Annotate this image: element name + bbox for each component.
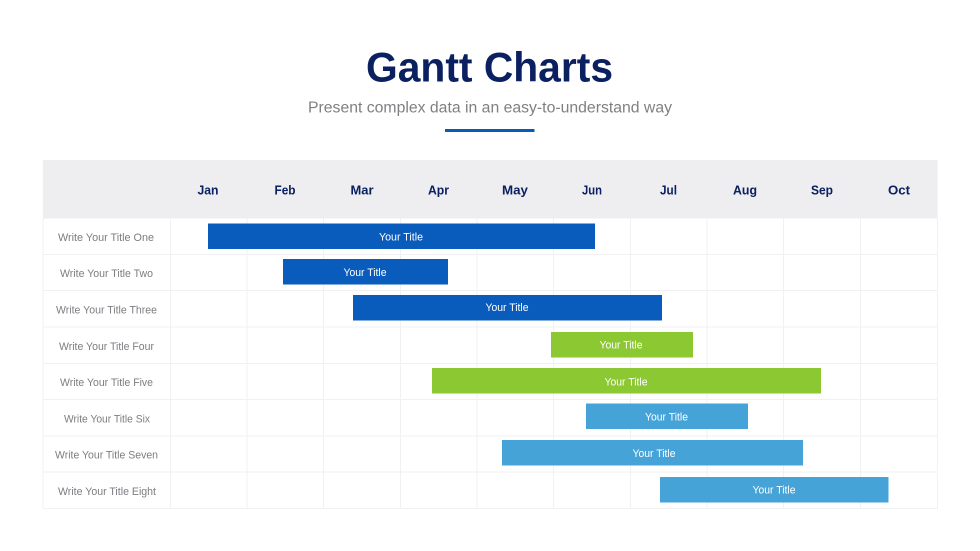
bar: row three: [353, 295, 662, 320]
bar: row two: Your Title: [344, 267, 386, 279]
month headers: May: [502, 182, 529, 198]
title underline: [445, 129, 534, 132]
row labels: Write Your Title Six: [64, 414, 150, 426]
bar: row two: [283, 259, 448, 284]
month headers: Apr: [428, 182, 449, 198]
bar: row six: Your Title: [645, 412, 688, 424]
bar: row seven: Your Title: [632, 448, 676, 460]
bar: row eight: Your Title: [752, 484, 796, 496]
bar: row one: Your Title: [379, 232, 423, 244]
row labels: Write Your Title Four: [59, 341, 154, 353]
bar: row five: Your Title: [604, 376, 648, 388]
bar: row three: Your Title: [486, 302, 528, 314]
title: Gantt Charts: [366, 44, 613, 90]
month headers: Jun: [582, 182, 602, 198]
month headers: Jan: [198, 182, 219, 198]
month headers: Sep: [811, 182, 833, 198]
row labels: Write Your Title Eight: [58, 486, 156, 498]
row labels: Write Your Title Five: [60, 377, 153, 389]
table grid: [43, 218, 938, 508]
month headers: [198, 182, 911, 198]
bar: row five: [432, 368, 821, 394]
bar: row eight: [660, 477, 888, 502]
table header band: [43, 160, 938, 218]
row labels: Write Your Title One: [58, 232, 154, 244]
month headers: Feb: [274, 182, 296, 198]
month headers: Oct: [888, 182, 911, 198]
row labels: Write Your Title Two: [60, 268, 153, 280]
subtitle: Present complex data in an easy-to-understand way: [308, 100, 672, 116]
row labels: Write Your Title Three: [56, 304, 157, 316]
month headers: Jul: [660, 182, 677, 198]
bar: row one: [208, 224, 595, 249]
bar: row four: [551, 332, 693, 358]
bar: row four: Your Title: [600, 340, 642, 352]
month headers: Aug: [733, 182, 757, 198]
row labels: [55, 232, 158, 498]
row labels: Write Your Title Seven: [55, 450, 158, 462]
month headers: Mar: [350, 182, 374, 198]
bar: row seven: [502, 440, 803, 466]
bar: row six: [586, 404, 748, 429]
